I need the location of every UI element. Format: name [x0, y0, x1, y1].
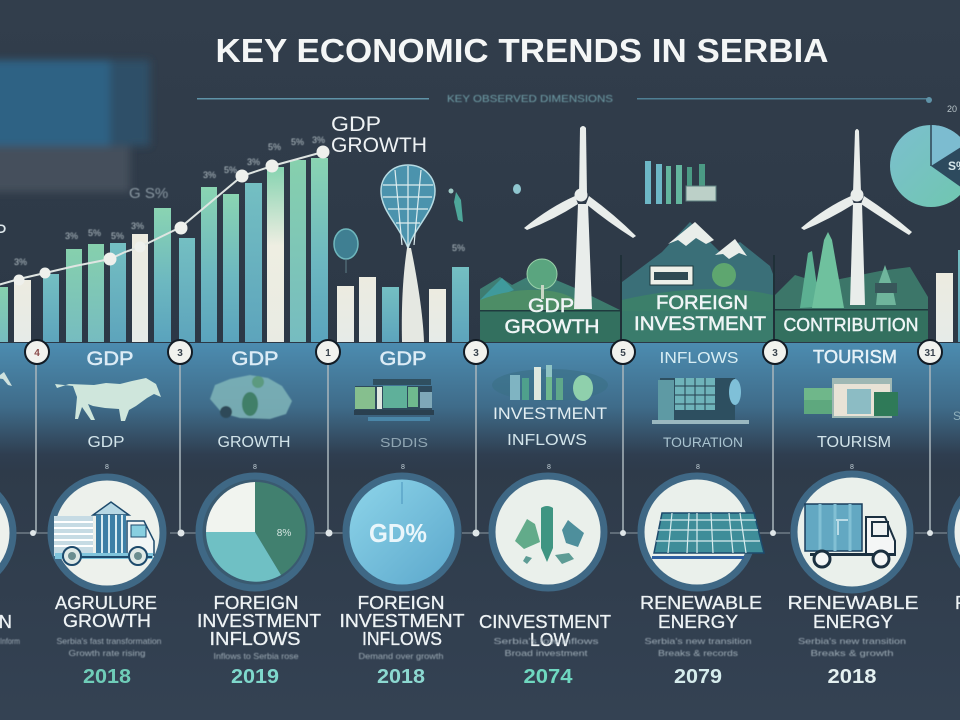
bottom years: 2018 [828, 666, 876, 688]
band sublabels: TOURISM [817, 434, 891, 451]
panel label: GDP growth: GROWTH [504, 317, 600, 338]
icon: small plant [448, 188, 463, 222]
icon: investment skyline [492, 365, 608, 401]
small separators above circles: 8 [696, 464, 700, 471]
chart value labels: 5% [111, 231, 124, 241]
panel label: foreign investment [634, 293, 766, 335]
bottom titles: INVESTMENT [197, 610, 321, 631]
circle: pie chart [199, 476, 311, 588]
timeline numbered nodes: 5 [620, 348, 626, 359]
bottom descriptions: Breaks & growth [810, 648, 894, 658]
icon: small lens [334, 229, 358, 273]
chart value labels: 5% [268, 142, 281, 152]
bottom titles: ENERGY [658, 611, 738, 632]
small separators above circles: 8 [105, 464, 109, 471]
bottom descriptions: Demand over growth [358, 651, 444, 661]
band sublabels: TOURATION [663, 434, 743, 450]
chart value labels: 5% [452, 243, 465, 253]
band headings: GDP [232, 349, 278, 370]
infographic canvas: GROWTH [331, 134, 427, 157]
band headings: INFLOWS [660, 350, 738, 367]
small separators above circles [105, 464, 854, 471]
chart value labels: 3% [247, 157, 260, 167]
bottom titles: INFLOWS [362, 628, 442, 649]
title: KEY ECONOMIC TRENDS IN SERBIA [216, 32, 828, 69]
chart value labels: 3% [65, 231, 78, 241]
timeline numbered nodes: 3 [473, 348, 479, 359]
bottom descriptions: Growth rate rising [68, 648, 146, 658]
timeline connectors [16, 352, 947, 536]
panel: mountains two [622, 222, 775, 342]
bottom titles: GROWTH [63, 610, 151, 631]
band headings: TOURISM [813, 347, 897, 367]
bottom titles: INFLOWS [210, 628, 300, 649]
band sublabels: SDDIS [380, 435, 428, 450]
small separators above circles: 8 [401, 464, 405, 471]
chart value labels: 3% [131, 221, 144, 231]
icon: wind turbine two [801, 129, 912, 305]
subtitle rule and label: 20 [947, 104, 957, 114]
circle: GD percent [346, 476, 458, 588]
bottom descriptions: Serbia's new transition [644, 636, 752, 646]
bottom titles: AGRULURE [55, 592, 157, 613]
circle: GD percent: GD% [369, 518, 427, 548]
bottom years: 2019 [231, 666, 279, 688]
timeline band [0, 343, 960, 470]
bar chart: GDP growth [0, 158, 960, 342]
icon: factory unit [354, 379, 434, 421]
small separators above circles: 8 [547, 464, 551, 471]
circle: truck and bank [51, 477, 163, 589]
timeline numbered nodes: 31 [924, 348, 936, 359]
bottom descriptions: Serbia's low inflows [494, 636, 598, 646]
panel: forest three [775, 232, 928, 342]
bottom titles [0, 592, 960, 650]
bottom years: 2018 [377, 666, 425, 688]
chart value labels: G S% [129, 185, 168, 202]
bottom titles: ENERGY [813, 611, 893, 632]
subtitle rule and label: KEY OBSERVED DIMENSIONS [447, 94, 613, 105]
small separators above circles: 8 [850, 464, 854, 471]
small separators above circles: 8 [253, 464, 257, 471]
bottom descriptions: Serbia's fast transformation [56, 636, 162, 646]
subtitle rule and label [197, 94, 957, 114]
icon: map cluster [210, 375, 292, 419]
circle: delivery truck [794, 474, 910, 590]
timeline numbered nodes: 3 [177, 348, 183, 359]
bottom titles: INVESTMENT [340, 610, 464, 631]
bottom descriptions: Breaks & records [658, 648, 738, 658]
line chart: GDP trend [0, 146, 330, 286]
circle: solar panel [641, 476, 764, 588]
circle: left edge [0, 477, 13, 589]
circle: pie chart: 8% [277, 528, 291, 539]
chart value labels: 5% [291, 137, 304, 147]
panel label: GDP growth: GDP [528, 296, 574, 317]
icon: office building [652, 378, 749, 424]
chart value labels: 3% [312, 135, 325, 145]
blurred blue block top left [0, 60, 150, 192]
timeline numbered nodes: 3 [772, 348, 778, 359]
band sublabels: INFLOWS [507, 432, 587, 449]
icon: Serbia animal map [55, 378, 161, 421]
bottom years: 2074 [524, 666, 573, 688]
panel label: contribution: CONTRIBUTION [784, 314, 918, 335]
chart value labels: 3% [203, 170, 216, 180]
circle: right edge [951, 476, 960, 588]
bottom titles: LOW [530, 629, 571, 650]
bottom years: 2079 [674, 666, 722, 688]
band headings: GDP [380, 349, 426, 370]
icon: globe balloon [381, 165, 435, 342]
panel: landscape one [480, 255, 622, 342]
chart value labels: 5% [224, 165, 237, 175]
chart value labels: 3% [14, 257, 27, 267]
bottom descriptions: Broad investment [504, 648, 588, 658]
panel label: foreign investment: FOREIGN [656, 293, 748, 314]
icon: wind turbine one [524, 126, 636, 309]
timeline numbered nodes: 4 [34, 348, 40, 359]
bottom years [83, 666, 876, 688]
icon: small trend marker [513, 184, 521, 194]
bottom titles: FOREIGN [214, 592, 298, 613]
bottom years: 2018 [83, 666, 131, 688]
band sublabels: GDP [88, 434, 124, 451]
timeline numbered nodes: 1 [325, 348, 331, 359]
icon: left edge animal [0, 372, 12, 386]
icon: tourism building [804, 378, 898, 418]
bottom descriptions: Serbia's new transition [798, 636, 906, 646]
panel label: foreign investment: INVESTMENT [634, 314, 766, 335]
bottom titles: FOREIGN [358, 592, 444, 613]
bottom titles: RENEWABLE [788, 592, 918, 613]
bottom descriptions [0, 636, 906, 661]
circle: plants [492, 476, 604, 588]
pie chart top right [890, 125, 960, 207]
bottom descriptions: Inform [0, 636, 20, 646]
icon: small bar group [645, 161, 716, 204]
band headings [86, 347, 897, 370]
band sublabels [88, 404, 891, 451]
chart label: GDP growth: GDP [331, 113, 381, 136]
chart value labels [14, 135, 465, 267]
bottom titles: RENEWABLE [640, 592, 762, 613]
chart value labels: 5% [88, 228, 101, 238]
band sublabels: GROWTH [218, 434, 290, 451]
band headings: GDP [86, 349, 134, 370]
timeline numbered nodes [25, 340, 942, 364]
bottom descriptions: Inflows to Serbia rose [214, 651, 299, 661]
panel label: GDP growth [504, 296, 600, 338]
bottom titles: CINVESTMENT [479, 611, 611, 632]
band sublabels: INVESTMENT [493, 404, 607, 423]
